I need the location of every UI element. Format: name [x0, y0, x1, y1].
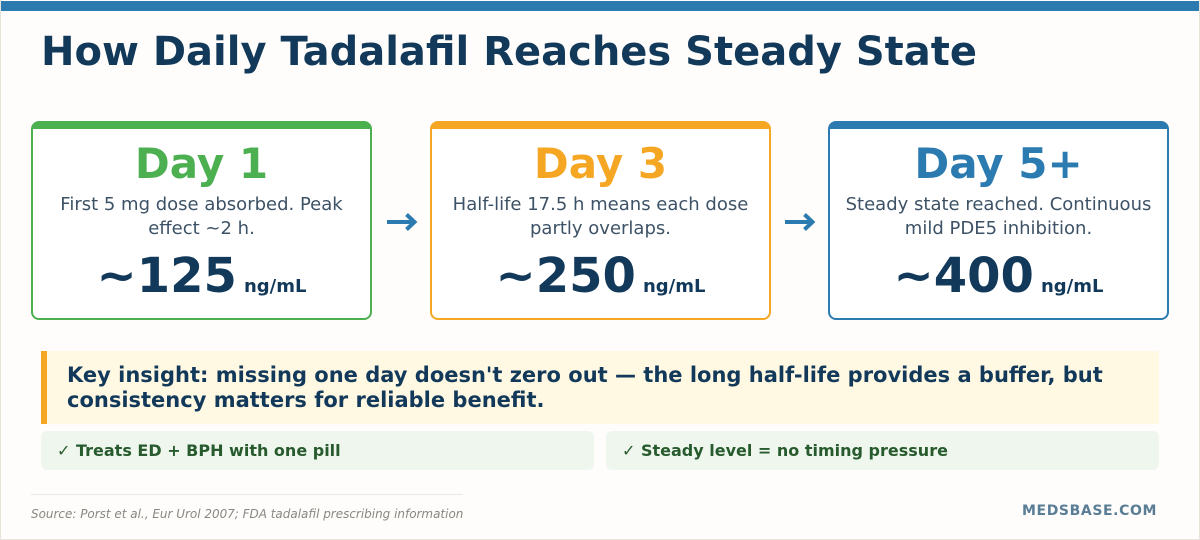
arrow: day 3 to day 5	[785, 213, 816, 231]
day 1 description	[60, 194, 343, 239]
callout text: Key insight: missing one day doesn't zero out — the long half-life provides a buffer, but	[67, 363, 1103, 387]
day 3 description	[453, 194, 748, 239]
arrow: day 1 to day 3	[387, 213, 418, 231]
day 5+ description	[846, 194, 1151, 239]
day 5+ description: mild PDE5 inhibition.	[905, 218, 1092, 239]
brand: MEDSBASE.COM	[1022, 503, 1157, 519]
benefit: treats ED + BPH: ✓ Treats ED + BPH with one pill	[57, 441, 341, 460]
day 5+ description: Steady state reached. Continuous	[846, 194, 1151, 215]
source citation: Source: Porst et al., Eur Urol 2007; FDA tadalafil prescribing information	[31, 507, 463, 521]
day 5+ heading: Day 5+	[914, 139, 1083, 188]
benefit: steady level	[606, 431, 1159, 470]
footer rule	[31, 494, 463, 495]
callout text: consistency matters for reliable benefit.	[67, 388, 544, 412]
benefit: treats ED + BPH	[41, 431, 594, 470]
day 3 description: partly overlaps.	[530, 218, 671, 239]
callout text	[67, 363, 1103, 412]
day 3 heading: Day 3	[534, 139, 667, 188]
day 3 description: Half-life 17.5 h means each dose	[453, 194, 748, 215]
callout: key insight	[41, 351, 1159, 424]
title: How Daily Tadalafil Reaches Steady State	[41, 29, 977, 75]
panel: day 3	[430, 121, 771, 320]
day 5+ value: ~400 ng/mL	[894, 248, 1103, 304]
panel: day 1	[31, 121, 372, 320]
day 1 description: First 5 mg dose absorbed. Peak	[60, 194, 343, 215]
day 1 value: ~125 ng/mL	[97, 248, 306, 304]
day 3 value: ~250 ng/mL	[496, 248, 705, 304]
day 1 heading: Day 1	[135, 139, 268, 188]
top accent bar	[0, 1, 1200, 11]
panel: day 5+	[828, 121, 1169, 320]
benefit: steady level: ✓ Steady level = no timing pressure	[622, 441, 948, 460]
day 1 description: effect ~2 h.	[148, 218, 255, 239]
